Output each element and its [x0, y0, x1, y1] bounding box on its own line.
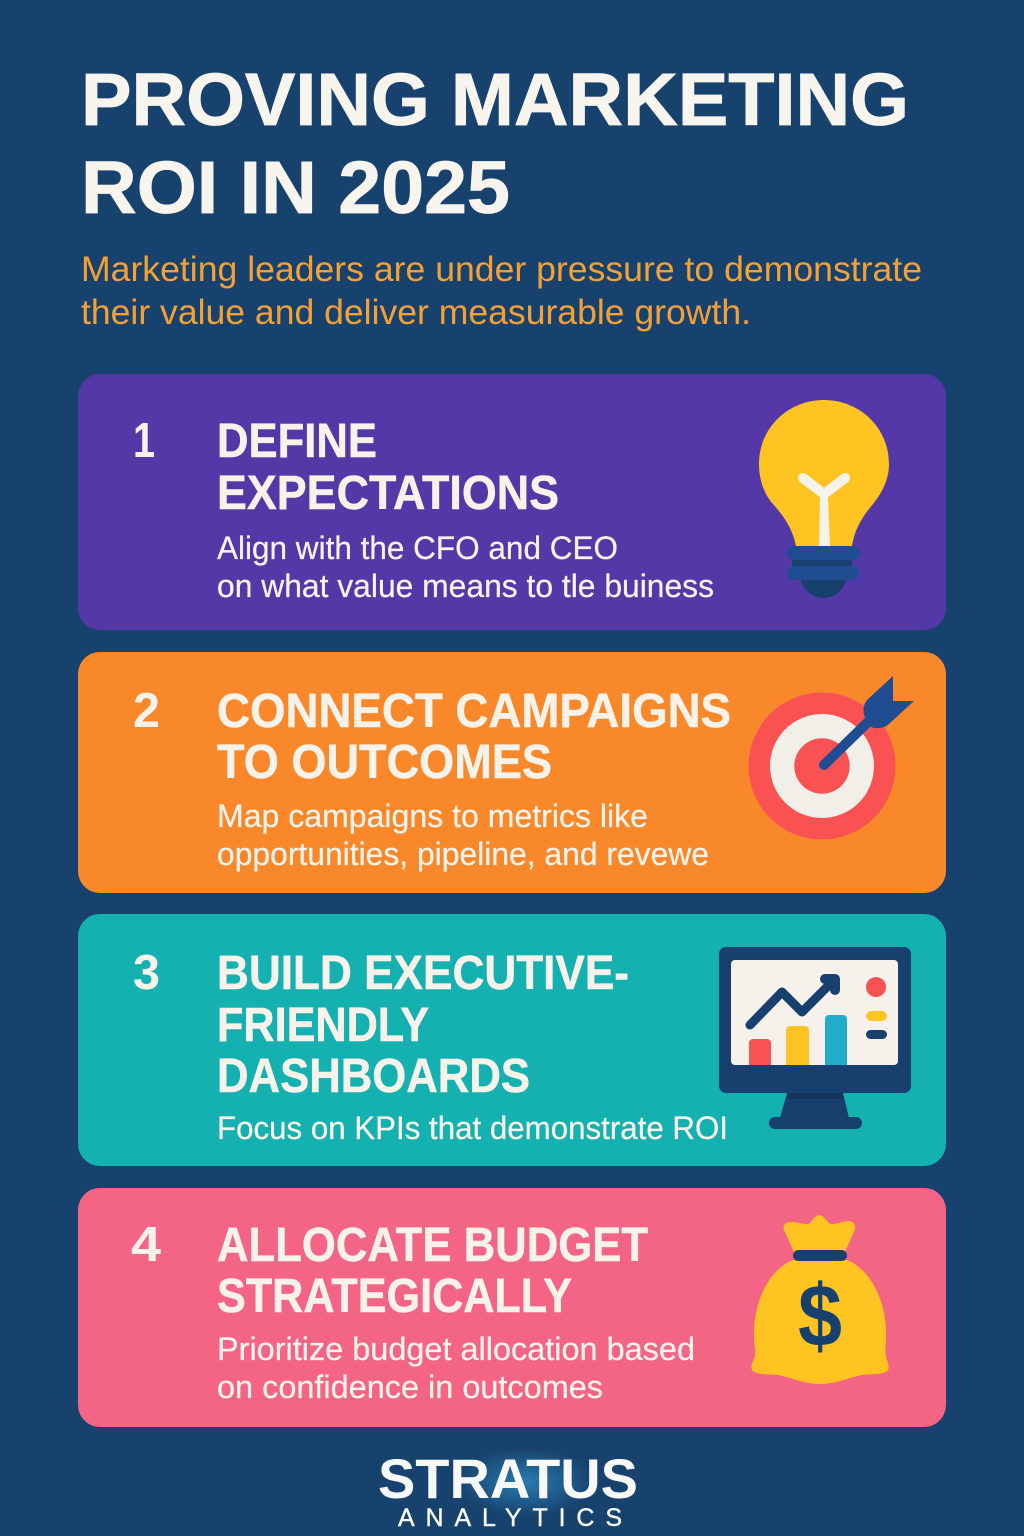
description: step 1: Align with the CFO and CEO: [217, 530, 618, 566]
heading: define expectations: [217, 415, 559, 520]
description: step 2: Map campaigns to metrics like: [217, 798, 648, 834]
icon: money bag: [751, 1215, 889, 1384]
heading: build executive-friendly dashboards: DASHBOARDS: [217, 1050, 530, 1103]
description: step 4: [217, 1331, 695, 1405]
description: step 4: Prioritize budget allocation based: [217, 1331, 695, 1367]
panel: step 3 build executive-friendly dashboards: [78, 914, 946, 1166]
icon: target with dart: [748, 676, 914, 840]
heading: allocate budget strategically: ALLOCATE BUDGET: [217, 1219, 648, 1272]
title: [81, 58, 909, 229]
heading: connect campaigns to outcomes: TO OUTCOMES: [217, 736, 552, 789]
heading: build executive-friendly dashboards: BUILD EXECUTIVE-: [217, 947, 629, 1000]
subtitle: Marketing leaders are under pressure to demonstrate: [81, 250, 922, 289]
description: step 3: Focus on KPIs that demonstrate ROI: [217, 1110, 728, 1146]
step number 4: 4: [131, 1218, 161, 1272]
heading: allocate budget strategically: STRATEGICALLY: [217, 1270, 572, 1323]
logo: Stratus Analytics: STRATUS: [378, 1447, 638, 1510]
subtitle: their value and deliver measurable growth.: [81, 293, 751, 332]
heading: connect campaigns to outcomes: [217, 685, 731, 789]
logo: Stratus Analytics: ANALYTICS: [398, 1504, 622, 1532]
heading: define expectations: EXPECTATIONS: [217, 467, 559, 520]
icon: light bulb: [759, 400, 889, 598]
heading: build executive-friendly dashboards: [217, 947, 629, 1103]
description: step 1: on what value means to tle buiness: [217, 568, 714, 604]
heading: connect campaigns to outcomes: CONNECT CAMPAIGNS: [217, 685, 731, 738]
icon: dashboard monitor: [719, 947, 911, 1129]
icon: money bag: $: [798, 1266, 842, 1365]
description: step 2: [217, 798, 709, 872]
title: PROVING MARKETING: [81, 58, 909, 141]
heading: build executive-friendly dashboards: FRIENDLY: [217, 999, 429, 1052]
panel: step 2 connect campaigns to outcomes: [78, 652, 946, 893]
heading: allocate budget strategically: [217, 1219, 648, 1323]
description: step 1: [217, 530, 714, 604]
heading: define expectations: DEFINE: [217, 415, 377, 468]
subtitle: [81, 250, 922, 332]
title: ROI IN 2025: [81, 146, 510, 229]
step number 2: 2: [133, 684, 160, 738]
description: step 2: opportunities, pipeline, and revewe: [217, 836, 709, 872]
description: step 4: on confidence in outcomes: [217, 1369, 603, 1405]
panel: step 4 allocate budget strategically: [78, 1188, 946, 1427]
step number 3: 3: [133, 946, 160, 1000]
step number 1: 1: [133, 414, 155, 468]
panel: step 1 define expectations: [78, 374, 946, 630]
